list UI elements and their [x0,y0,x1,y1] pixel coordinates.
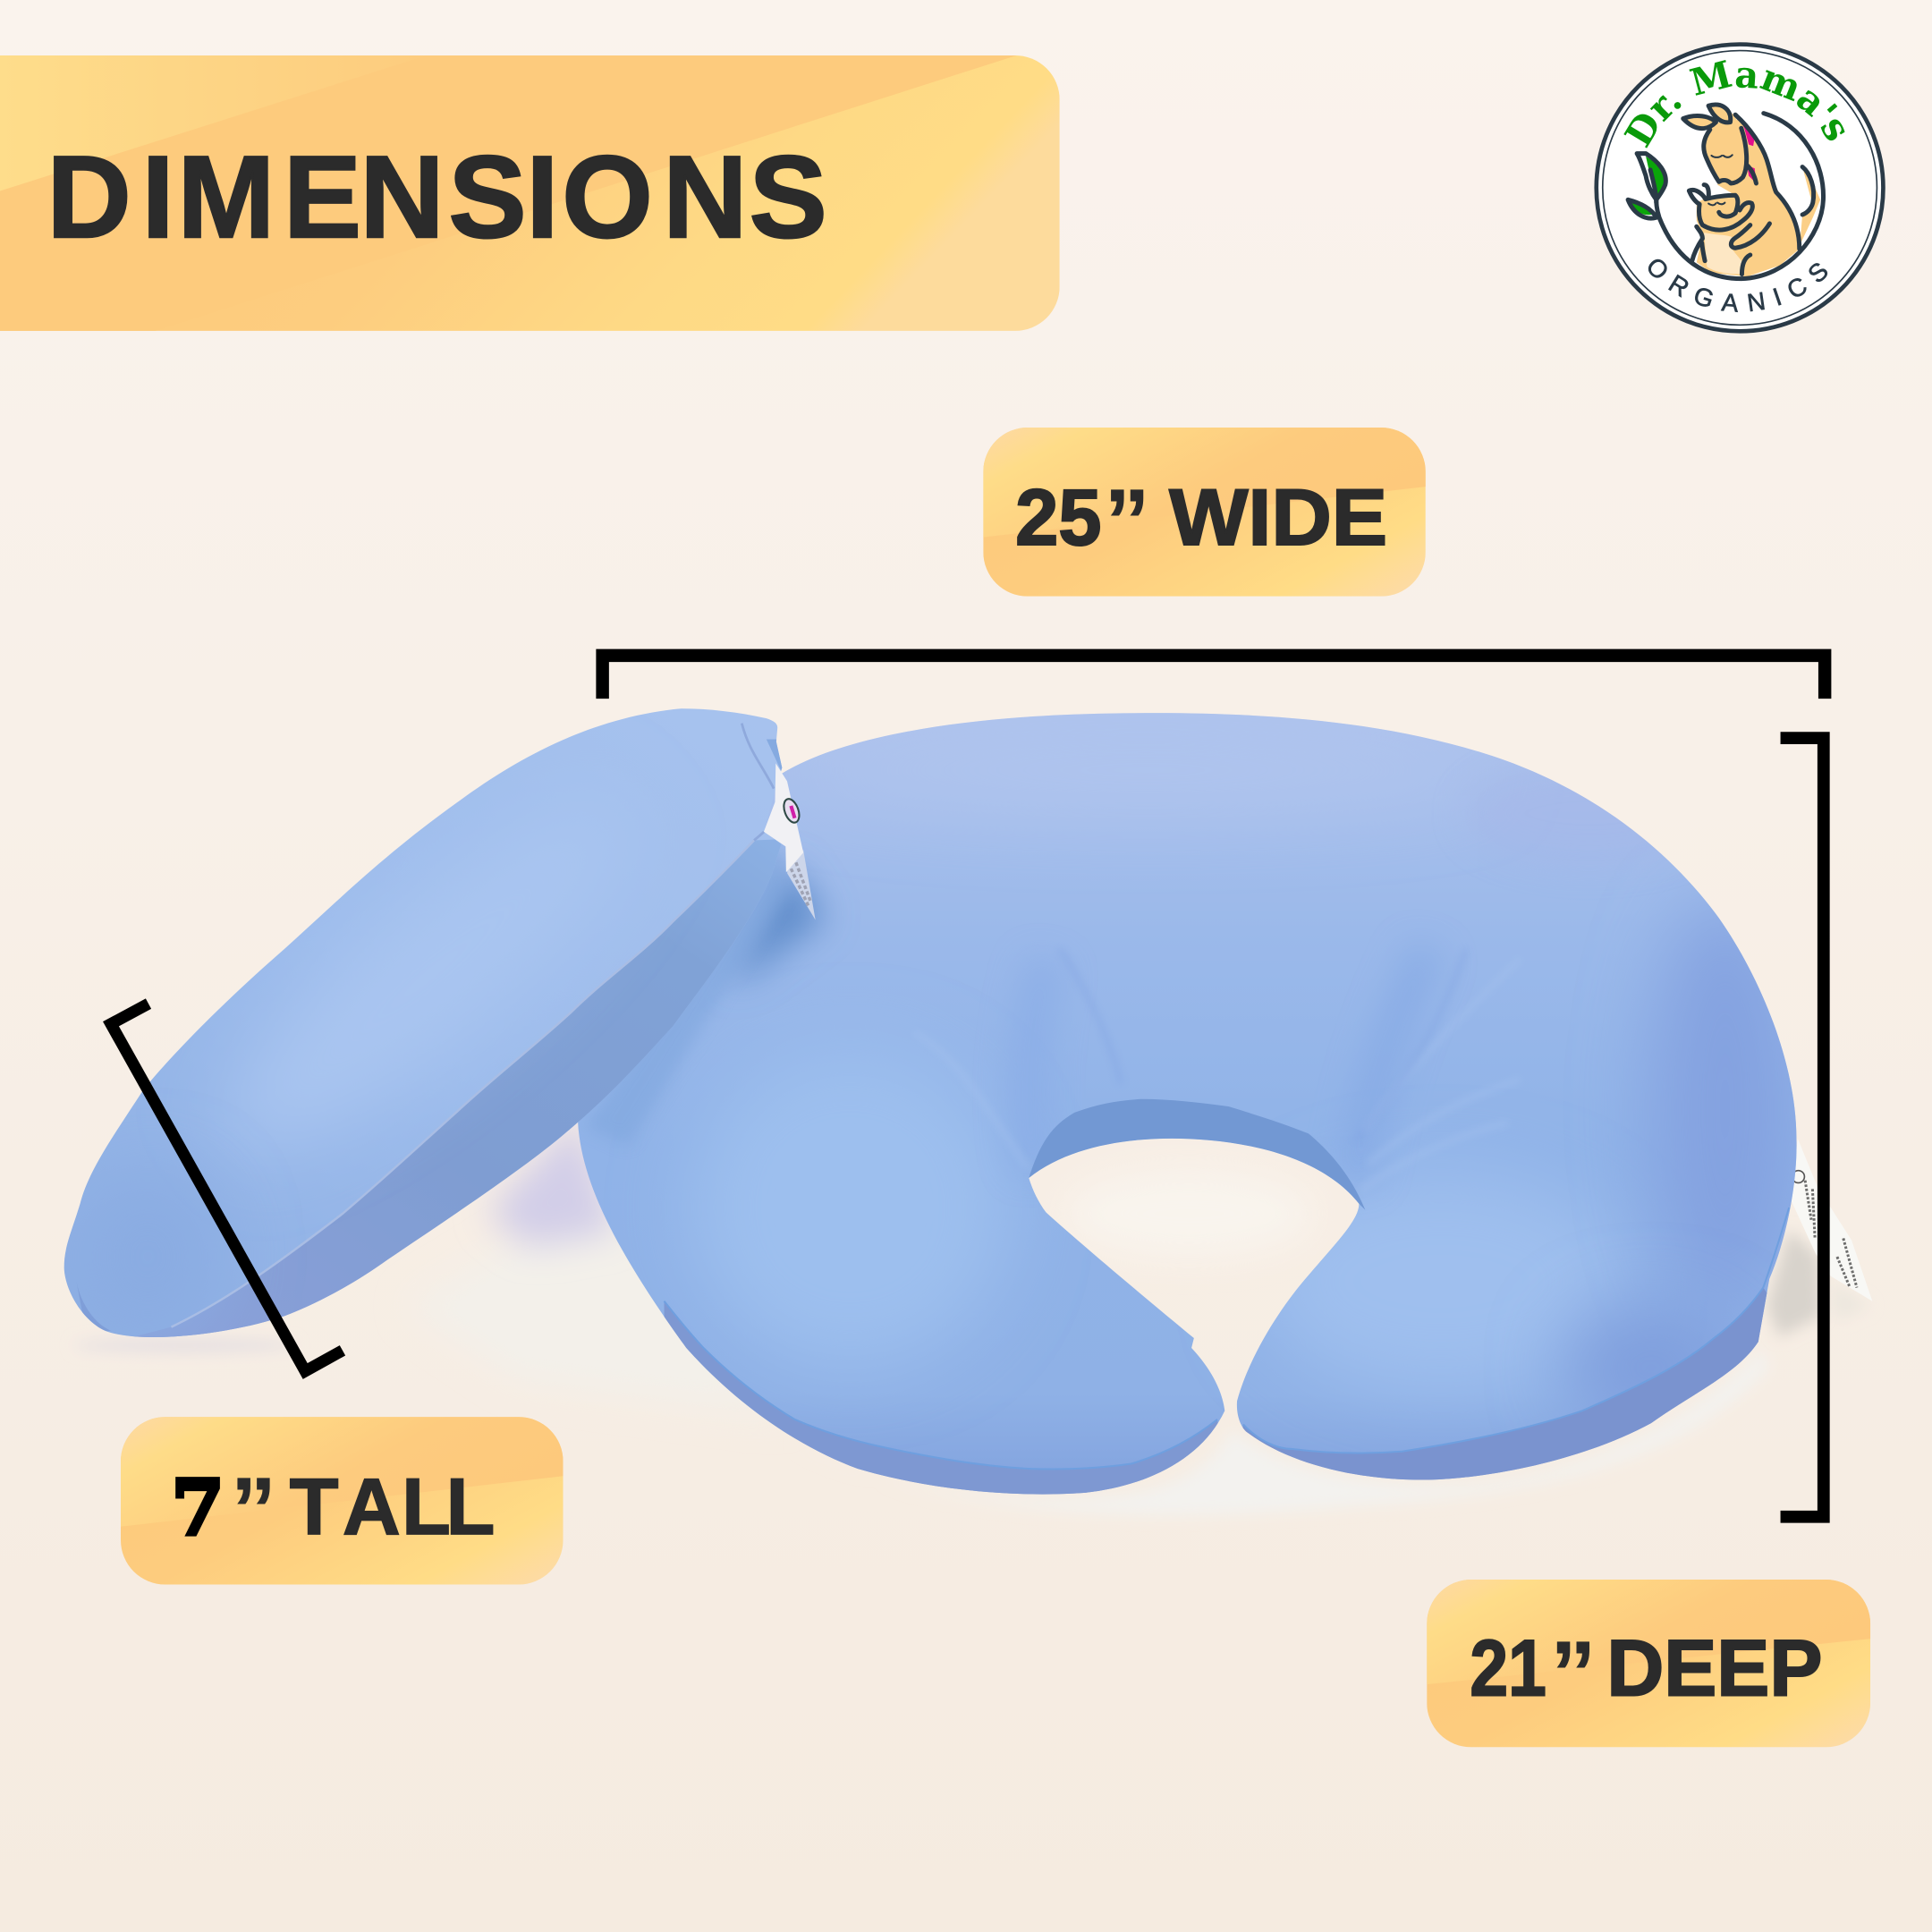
nursing pillow [567,702,1811,1515]
heading banner: DIMENSIONS [0,55,1060,331]
label pill: 21 inch deep: 21 [1470,1623,1546,1713]
label pill: 25 inch wide: 25 [1015,472,1102,562]
brand logo: Dr. Mama's Organics: ORGANICS [1648,259,1828,313]
kangaroo fills [1697,116,1820,276]
satin tag on bolster [764,763,816,919]
label pill: 21 inch deep [1427,1580,1870,1747]
bolster end cap folds [741,724,774,840]
bolster seam [171,840,754,1327]
label pill: 25 inch wide: WIDE [1169,472,1387,562]
bolster pillow [64,708,782,1337]
care tag on pillow right side [1792,1139,1872,1301]
bolster highlight [237,889,531,1143]
heading text: DIMENSIONS [47,131,827,262]
bolster lower gusset [134,839,782,1337]
label pill: 25 inch wide: ” [1104,470,1150,573]
label pill: 21 inch deep: DEEP [1606,1623,1822,1713]
width bracket [603,656,1825,699]
depth bracket [1781,738,1824,1517]
label pill: 25 inch wide [983,428,1426,597]
brand logo: Dr. Mama's Organics [1594,42,1885,334]
brand logo: Dr. Mama's Organics: Dr. Mama's [1623,60,1844,148]
kangaroo outlines [1628,105,1824,279]
pillow highlights and shading [585,733,1799,1429]
label pill: 7 inch tall: ” [231,1457,276,1561]
leaves [1631,157,1665,215]
label pill: 21 inch deep: ” [1550,1622,1597,1725]
height bracket [111,1004,343,1371]
inner opening gusset [1029,1099,1365,1210]
label pill: 7 inch tall [121,1417,564,1585]
ground shadows [74,1115,1870,1514]
tag mini logo [781,797,802,825]
left foot gusset [664,1302,1218,1495]
seams [664,1208,1789,1470]
label pill: 7 inch tall: TALL [290,1462,495,1551]
label pill: 7 inch tall: 7 [171,1464,225,1554]
right foot gusset [1243,1288,1767,1479]
